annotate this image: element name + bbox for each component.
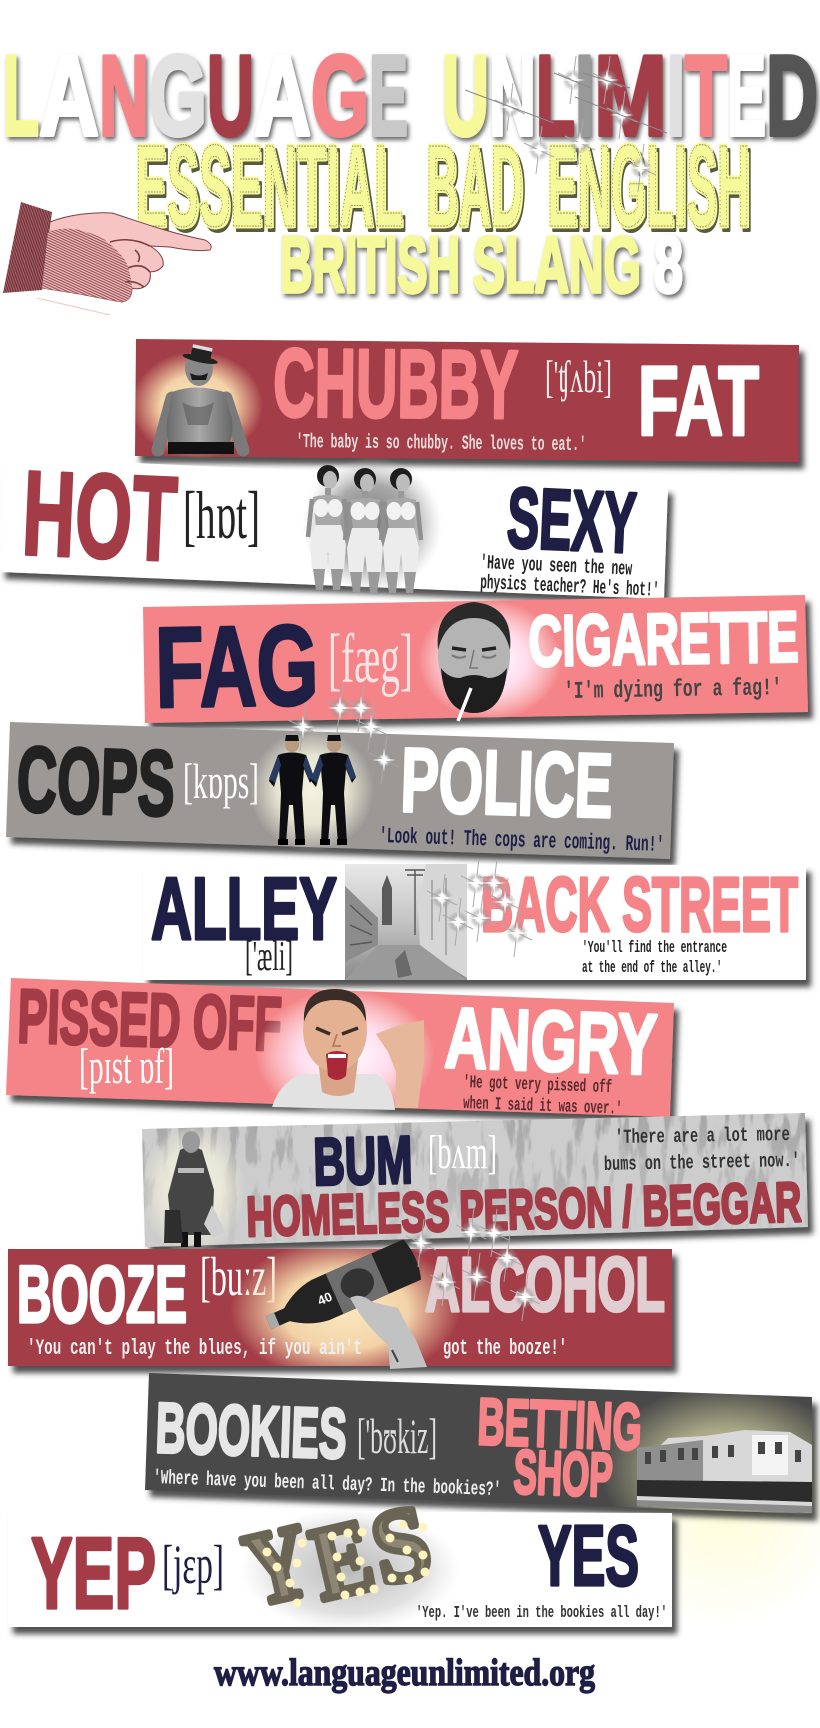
- example sentence: 'You can't play the blues, if you ain't: [27, 1336, 362, 1361]
- phonetic: [jɛp]: [162, 1534, 224, 1595]
- meaning: betting shop: BETTING: [477, 1384, 643, 1464]
- phonetic: [bʌm]: [428, 1126, 497, 1179]
- glow behind betting shop: [595, 1390, 820, 1630]
- example sentence: 'Have you seen the new: [480, 552, 633, 582]
- marquee light letters: yes: E: [301, 1497, 384, 1622]
- sparkles over title: [465, 56, 667, 192]
- title: Language Unlimited: L: [536, 33, 575, 160]
- example sentence: [463, 1073, 622, 1120]
- subtitle: Essential Bad English: ESSENTIAL: [138, 125, 406, 255]
- word: booze: BOOZE: [17, 1250, 187, 1340]
- marquee light letters: yes: [234, 1483, 460, 1632]
- example sentence: 'Where have you been all day? In the bookies?': [153, 1467, 501, 1502]
- title: Language Unlimited: I: [575, 33, 594, 160]
- photo: bearded man smoking: [418, 600, 562, 721]
- example sentence: when I said it was over.': [463, 1094, 622, 1120]
- word: yep: YEP: [31, 1518, 156, 1630]
- photo: three women in vintage underwear: [302, 457, 442, 593]
- subtitle: Essential Bad English: ESSENTIAL: [135, 121, 403, 251]
- panel: bookies: [145, 1373, 820, 1526]
- panel: chubby: [131, 328, 799, 462]
- photo: hand holding bottle: [233, 1239, 457, 1369]
- subtitle: British Slang 8: BRITISH: [280, 220, 460, 309]
- phonetic: [fæg]: [328, 621, 413, 698]
- title: Language Unlimited: N: [99, 33, 149, 160]
- subtitle: Essential Bad English: BAD: [426, 121, 523, 251]
- title: Language Unlimited: [3, 33, 818, 160]
- word: alley: ALLEY: [151, 859, 337, 958]
- photo: back alley: [345, 864, 467, 980]
- meaning: alcohol: ALCOHOL: [425, 1242, 665, 1328]
- phonetic: [hɒt]: [183, 477, 260, 553]
- photo: hand holding bottle: 40: [315, 1289, 334, 1308]
- phonetic: [buːz]: [200, 1246, 277, 1307]
- example sentence: [604, 1124, 800, 1177]
- example sentence: got the booze!': [443, 1336, 567, 1361]
- sparkles over police: [288, 684, 399, 784]
- subtitle: British Slang 8: 8: [654, 220, 683, 309]
- panel: fag: [143, 595, 808, 732]
- subtitle: Essential Bad English: BAD: [426, 121, 523, 251]
- phonetic: [kɒps]: [183, 753, 259, 809]
- panel: pissed off: [6, 974, 674, 1121]
- subtitle: Essential Bad English: BAD: [429, 125, 526, 255]
- meaning: angry: ANGRY: [443, 990, 659, 1093]
- example sentence: 'Yep. I've been in the bookies all day!': [416, 1604, 667, 1623]
- marquee light letters: yes: Y: [234, 1502, 321, 1628]
- meaning: betting shop: [477, 1384, 643, 1510]
- title: Language Unlimited: E: [369, 33, 408, 160]
- title: Language Unlimited: L: [3, 33, 39, 160]
- phonetic: [pɪst ɒf]: [79, 1038, 174, 1094]
- word: pissed off: PISSED OFF: [16, 974, 283, 1067]
- panel: alley: [143, 859, 806, 980]
- title: Language Unlimited: A: [39, 33, 99, 160]
- word: fag: FAG: [154, 602, 319, 732]
- meaning: sexy: SEXY: [505, 470, 638, 572]
- panel: bum: [141, 1113, 812, 1256]
- phonetic: ['æli]: [245, 934, 293, 980]
- example sentence: [480, 552, 660, 603]
- sparkles over back street: [427, 859, 532, 957]
- word: hot: HOT: [20, 446, 180, 587]
- title: Language Unlimited: M: [594, 33, 667, 160]
- panel: hot: [0, 446, 668, 603]
- phonetic: ['ʧʌbi]: [545, 351, 612, 402]
- title: Language Unlimited: U: [442, 33, 489, 160]
- photo: row of betting shop buildings: [607, 1393, 812, 1514]
- example sentence: [582, 939, 727, 978]
- photo: shirtless man in boater hat: [131, 342, 263, 459]
- example sentence: physics teacher? He's hot!': [480, 572, 660, 603]
- word: cops: COPS: [15, 727, 176, 836]
- meaning: police: POLICE: [399, 730, 614, 837]
- title: Language Unlimited: T: [685, 33, 727, 160]
- title: Language Unlimited: N: [489, 33, 536, 160]
- example sentence: 'The baby is so chubby. She loves to eat.': [296, 431, 586, 457]
- title: Language Unlimited: U: [207, 33, 254, 160]
- title: Language Unlimited: I: [667, 33, 685, 160]
- panel: booze: [8, 1238, 672, 1382]
- example sentence: 'He got very pissed off: [463, 1073, 612, 1098]
- title: Language Unlimited: A: [254, 33, 311, 160]
- panel: yep: [8, 1483, 672, 1632]
- phonetic: ['bʊkiz]: [357, 1408, 437, 1464]
- subtitle: British Slang 8: SLANG: [473, 220, 641, 309]
- meaning: yes: YES: [538, 1509, 639, 1604]
- photo: homeless woman with bags: [141, 1124, 245, 1256]
- panel: cops: [6, 722, 674, 859]
- website url: www.languageunlimited.org: [214, 1652, 595, 1694]
- marquee light letters: yes: S: [361, 1483, 441, 1607]
- meaning: fat: FAT: [638, 346, 759, 456]
- subtitle: Essential Bad English: ESSENTIAL: [135, 121, 403, 251]
- sparkles over alcohol: [406, 1208, 540, 1321]
- word: chubby: CHUBBY: [273, 328, 519, 439]
- word: bum: BUM: [313, 1123, 413, 1200]
- icon: pointing hand: [3, 202, 211, 315]
- photo: shouting man pointing: [255, 988, 435, 1121]
- title: Language Unlimited: G: [311, 33, 369, 160]
- title: Language Unlimited: G: [149, 33, 207, 160]
- photo: two police officers: [250, 728, 374, 852]
- title: Language Unlimited: E: [727, 33, 766, 160]
- word: bookies: BOOKIES: [154, 1389, 348, 1474]
- meaning: betting shop: SHOP: [513, 1438, 614, 1510]
